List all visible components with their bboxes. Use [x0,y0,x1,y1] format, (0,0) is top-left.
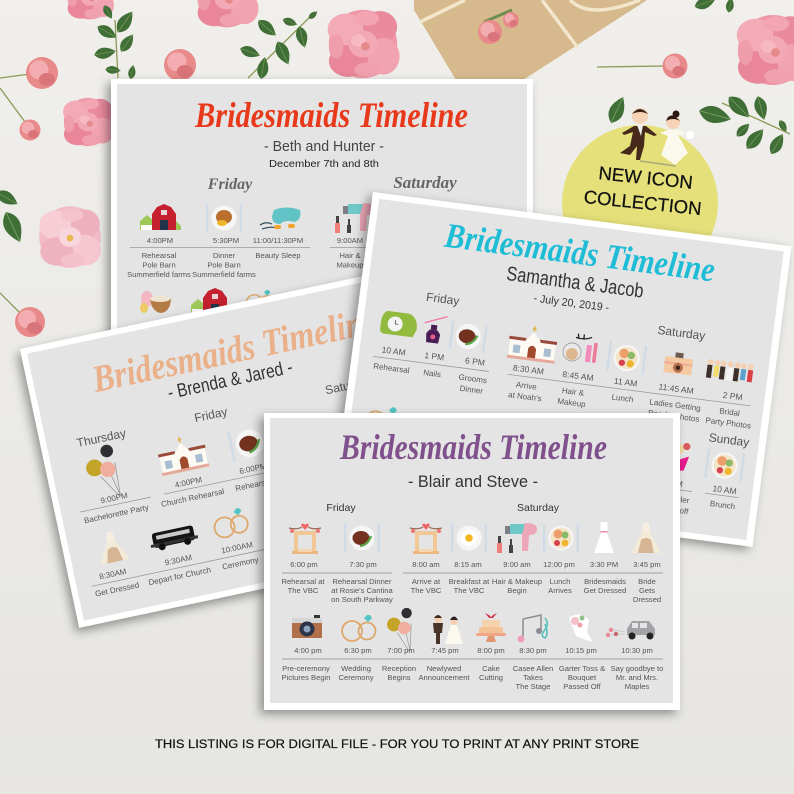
times row one: 8:00 am [412,560,440,569]
times: 6 PM [465,355,485,368]
labels row one: Hair & Makeup [492,577,542,586]
labels row two: The Stage [515,682,551,691]
day headings: Saturday [517,502,560,514]
icon: brunch plate [704,449,745,483]
times row two: 10:30 pm [621,646,653,655]
times row two: 4:00 pm [294,646,322,655]
day headings [326,502,560,514]
labels row two [94,555,259,599]
badge illustration: running couple [620,108,694,166]
labels row one: Arrive at [412,577,441,586]
labels row two: Cutting [479,673,503,682]
times row one: 4:00PM [174,475,203,490]
labels row two: Newlywed [427,664,461,673]
day headings: Saturday [657,323,706,343]
icon: nail polish [422,314,448,344]
day headings: Friday [425,290,460,308]
times: 11:00/11:30PM [253,236,303,245]
labels: Summerfield farms [127,270,191,279]
labels row one: Arrives [548,586,572,595]
day headings: Friday [326,502,356,514]
times row one: 7:30 pm [349,560,377,569]
times [147,236,363,245]
labels row two: Get Dressed [94,580,140,599]
icon: bridal dress [94,529,130,565]
times row one: 3:30 PM [590,560,618,569]
times row two: 8:00 pm [477,646,505,655]
labels row one: The VBC [454,586,485,595]
icon: barn [140,204,181,230]
times row two: 7:45 pm [431,646,459,655]
icon: barn second row [191,288,232,314]
panel: purple timeline card [264,413,680,710]
badge text: NEW ICON [598,162,694,193]
labels: Party Photos [705,416,751,431]
labels: Lunch [611,392,634,404]
day headings [412,290,763,449]
labels row two: Maples [625,682,649,691]
date: December 7th and 8th [269,158,379,170]
day headings [75,374,374,450]
icon: sleep mask [260,208,300,229]
labels row two: Say goodbye to [611,664,663,673]
panel: teal timeline card [334,192,791,547]
labels row one: Get Dressed [584,586,626,595]
labels row two: Reception [382,664,416,673]
labels: Makeup [557,397,587,409]
times third row: 6 PM [663,477,683,489]
labels row two: Depart for Church [148,565,212,587]
day heading: Friday: Friday [207,176,253,193]
times row two: 10:15 pm [565,646,597,655]
labels third row [658,493,736,522]
times row one: 12:00 pm [543,560,575,569]
icon: dinner plate [206,204,242,232]
icon: camera [663,351,694,375]
times row one [100,461,268,505]
labels: Nails [423,368,441,379]
icon: hair dryer and polish [335,203,375,233]
times row one: 6:00 pm [290,560,318,569]
labels row one: Bride [638,577,656,586]
icon: drink [672,441,691,473]
labels: Ready, Photos [647,408,700,424]
times row one: 9:00 am [503,560,531,569]
icon: rings [246,290,273,311]
labels [371,362,753,431]
labels row two: Wedding [341,664,371,673]
times: 9:00AM [337,236,363,245]
flowers and leaves [0,0,794,337]
times row one: 9:00PM [100,491,129,505]
labels row two: Passed Off [563,682,602,691]
labels: at Noah's [508,390,542,403]
labels row two: Mr. and Mrs. [616,673,658,682]
labels: Makeup [336,260,364,270]
labels: Rehearsal [142,251,177,260]
labels: Rehearsal [373,362,410,375]
labels row two: Casee Allen [513,664,553,673]
panel: red timeline card [111,79,533,349]
labels row one: Rehearsal [235,477,272,493]
labels row two [282,664,663,691]
day headings: Sunday [708,430,750,449]
badge text line two: COLLECTION [583,186,703,219]
labels row one: Lunch [550,577,570,586]
labels row one: Church Rehearsal [160,487,225,509]
day headings: Friday [193,404,229,425]
title: Bridesmaids Timeline (teal): Bridesmaids Timeline [442,216,717,290]
labels row one: Rehearsal Dinner [332,577,392,586]
title: Bridesmaids Timeline (purple): Bridesmaids Timeline [339,427,607,467]
labels: Pole Barn [207,260,241,270]
labels: Ladies Getting [649,397,701,413]
icon: rings third row [364,404,401,434]
labels row two: Ceremony [221,555,259,572]
labels: Bridal [719,406,741,418]
labels row one: Bachelorette Party [83,503,150,525]
times row two: 9:30AM [164,553,193,567]
icon row one [289,522,661,554]
labels row two: Takes [523,673,543,682]
labels: Hair & [339,251,361,260]
labels [127,251,364,279]
names: Beth and Hunter: - Beth and Hunter - [264,138,384,155]
labels row one: Rehearsal at [281,577,325,586]
times row one: 3:45 pm [633,560,661,569]
labels row one [281,577,661,604]
times: 8:30 AM [512,363,545,376]
labels row two: Garter Toss & [559,664,605,673]
names: Samantha and Jacob: Samantha & Jacob [505,263,645,303]
times row two: 10:00AM [220,540,254,555]
labels row two: Bouquet [568,673,597,682]
times [381,344,743,402]
times row two [98,540,254,581]
times third row: 10 AM [712,483,737,496]
icon: bridal party [706,359,754,383]
labels row two: Ceremony [338,673,374,682]
times row two: 8:30AM [98,567,128,581]
labels row one: The VBC [411,586,442,595]
panel: peach timeline card [20,260,500,628]
labels: Summerfield farms [192,270,256,279]
icon: steak plate [449,320,488,353]
icon: church [507,323,559,364]
icon: limo bus [148,524,199,552]
icon: balloons [82,444,122,501]
times row one [290,560,661,569]
day heading: Saturday: Saturday [393,173,457,192]
times row two: 6:30 pm [344,646,372,655]
times: 11:45 AM [658,381,694,396]
footer note: THIS LISTING IS FOR DIGITAL FILE - FOR YOU TO PRINT AT ANY PRINT STORE [155,739,639,751]
labels row one: on South Parkway [331,595,393,604]
icon row two [292,608,655,651]
icon: plate [227,424,272,462]
labels row two: Cake [482,664,500,673]
labels: Arrive [515,380,538,392]
names: Blair and Steve: - Blair and Steve - [408,472,538,491]
icon: rings [211,507,250,539]
labels third row: Brunch [709,499,736,511]
icon: cake bowl [140,291,171,313]
icon: salad plate [606,341,647,375]
labels row two: Begins [387,673,411,682]
title: Bridesmaids Timeline (red): Bridesmaids Timeline [194,95,468,135]
names: Brenda and Jared: - Brenda & Jared - [166,357,294,404]
times: 5:30PM [213,236,239,245]
times: 8:45 AM [562,369,594,383]
date: - July 20, 2019 - [533,293,610,314]
labels row one: Begin [507,586,527,595]
labels row two: Announcement [418,673,470,682]
times: 11 AM [613,376,638,389]
times: 10 AM [381,344,406,358]
times row one: 6:00PM [239,461,268,476]
labels row two: Pictures Begin [282,673,330,682]
times third row [663,477,737,496]
day headings: Saturday [324,374,374,397]
labels: Dinner [459,384,484,396]
icon: church [155,432,210,476]
labels row one: Gets [639,586,655,595]
times: 2 PM [722,390,743,402]
badge: new icon collection [562,108,718,281]
times row two: 8:30 pm [519,646,547,655]
labels third row: Send off [658,503,690,516]
labels: Hair & [561,386,585,398]
labels row one: at Rosie's Cantina [331,586,393,595]
labels row one: Bridesmaids [584,577,626,586]
times row two [294,646,653,655]
labels: Dinner [213,251,236,260]
labels: Beauty Sleep [255,251,301,260]
times row two: 7:00 pm [387,646,415,655]
title: Bridesmaids Timeline (peach): Bridesmaids Timeline [88,300,381,401]
labels: Pole Barn [142,260,176,270]
labels third row: Traveler [660,493,690,505]
labels row one: Dressed [633,595,661,604]
times row one: 8:15 am [454,560,482,569]
times: 4:00PM [147,236,173,245]
icon: makeup [562,332,599,364]
labels row two: Pre-ceremony [282,664,330,673]
day headings: Thursday [75,426,127,450]
labels row one [83,477,272,525]
gift box [414,0,647,80]
labels row one: Breakfast at [449,577,490,586]
labels: Grooms [458,373,487,385]
times: 1 PM [424,350,445,363]
labels row one: The VBC [288,586,319,595]
icon: clock [379,310,419,338]
